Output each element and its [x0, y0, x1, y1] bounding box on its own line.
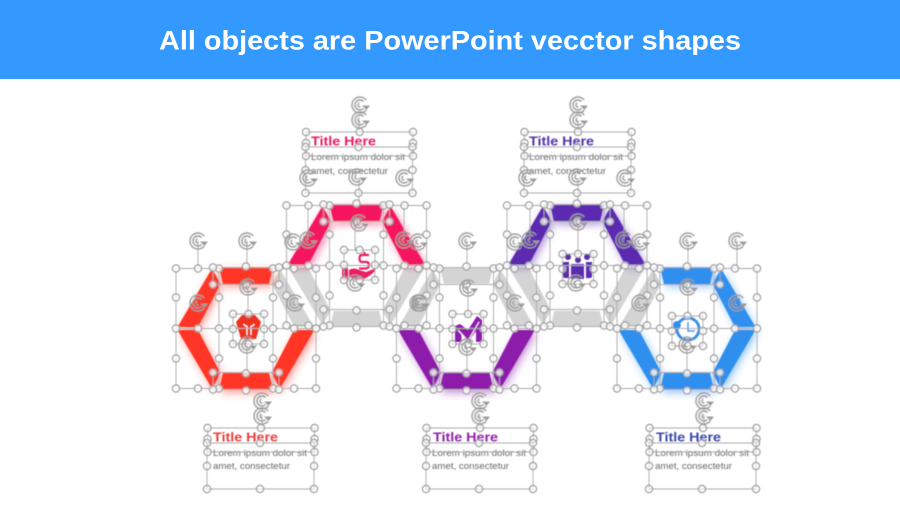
- text block: purple: Title Here: [433, 430, 498, 444]
- title: All objects are PowerPoint vecctor shapes: [159, 26, 741, 56]
- text block: violet: Lorem ipsum dolor sit: [529, 152, 623, 163]
- grey background hexagon segments: [272, 267, 662, 328]
- icon: chart letter M: [455, 316, 482, 342]
- hexagon: purple: [398, 330, 535, 390]
- text block: purple: amet, consectetur: [432, 461, 509, 472]
- text block: violet: amet, consectetur: [529, 166, 606, 177]
- rotation handles: [190, 97, 747, 424]
- text block: red: Title Here: [213, 430, 278, 444]
- text block: pink: amet, consectetur: [311, 166, 388, 177]
- text block: violet: Title Here: [529, 134, 594, 148]
- hexagon: red: [178, 267, 314, 390]
- text block: violet: [529, 134, 623, 177]
- text block: pink: [311, 134, 405, 177]
- hexagon: pink: [288, 204, 425, 264]
- hexagon: blue: [618, 267, 756, 390]
- text block: pink: Lorem ipsum dolor sit: [311, 152, 405, 163]
- icon: hand with dollar: [342, 252, 375, 280]
- header banner: [0, 0, 900, 79]
- text block: purple: Lorem ipsum dolor sit: [432, 448, 526, 459]
- icon: clock: [673, 318, 699, 340]
- text block: blue: [655, 430, 749, 472]
- text block: blue: Lorem ipsum dolor sit: [655, 448, 749, 459]
- text block: red: Lorem ipsum dolor sit: [213, 448, 307, 459]
- infographic body: [172, 97, 761, 493]
- text block: pink: Title Here: [311, 134, 376, 148]
- icon: gift heart: [236, 315, 261, 339]
- text block: red: [213, 430, 307, 472]
- selection frames and handles: [172, 120, 761, 493]
- text block: blue: amet, consectetur: [655, 461, 732, 472]
- hexagon: violet: [508, 204, 646, 264]
- text block: purple: [432, 430, 526, 472]
- text block: blue: Title Here: [656, 430, 721, 444]
- icon: group of people: [563, 254, 592, 279]
- text block: red: amet, consectetur: [213, 461, 290, 472]
